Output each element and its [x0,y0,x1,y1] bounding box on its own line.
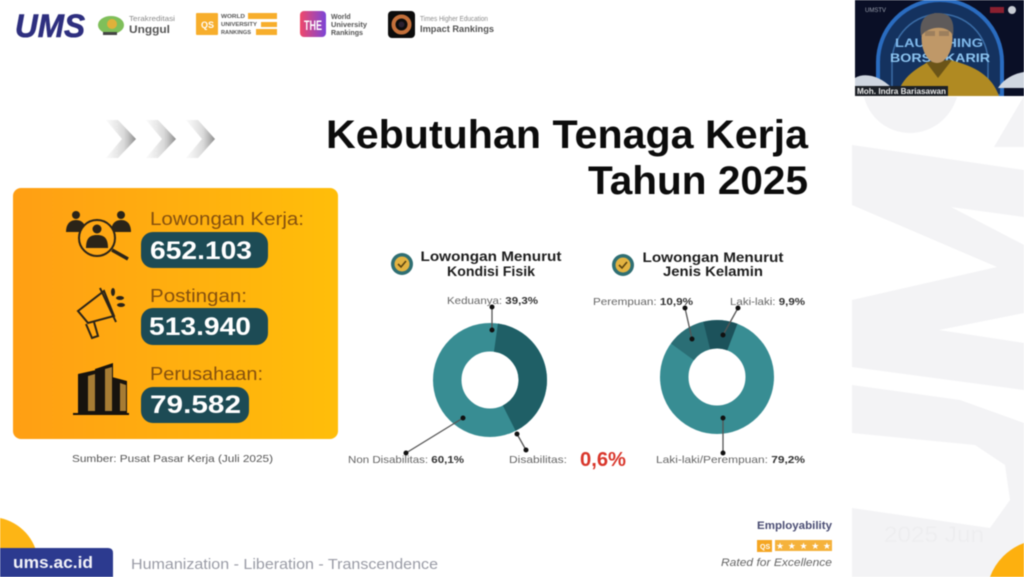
donut chart: kondisi fisik [404,304,538,456]
logo: Terakreditasi Unggul: Unggul [129,24,170,36]
QS employability rating [721,520,833,569]
corner shape: bottom left [0,518,38,560]
logo: THE World University Rankings: World [331,14,351,21]
footer tab: ums.ac.id: ums.ac.id [13,553,93,572]
title: Tahun 2025 [588,159,808,203]
label: Laki-laki: Laki-laki: 9,9% [730,296,806,308]
webcam: speaker video: LAUNCHING [895,36,983,50]
logo: Times Higher Education Impact Rankings: Times Higher Education [420,16,488,23]
webcam: speaker video: Moh. Indra Bariasawan [857,87,946,96]
value: 652.103 [141,232,268,268]
value: 0,6%: 0,6% [580,449,626,471]
label: Keduanya: Keduanya: 39,3% [447,295,539,307]
heading: jenis kelamin [612,250,784,279]
footer tagline: Humanization - Liberation - Transcendence [131,556,438,573]
decorative chevron arrows [106,120,215,158]
label: Non Disabilitas: Non Disabilitas: 60,1% [348,454,465,466]
value: 513.940: 513.940 [149,313,251,341]
logo: THE World University Rankings: THE [304,17,322,33]
logo: THE World University Rankings: Rankings [331,30,363,37]
icon: megaphone [78,288,125,338]
icon: check badge [391,253,413,275]
leader lines [404,304,528,456]
logo: Terakreditasi Unggul: Terakreditasi [129,14,175,23]
icon: people search [66,211,131,259]
logo: UMS: UMS [15,8,86,44]
logo row [15,8,494,44]
logo: Terakreditasi Unggul [98,14,175,36]
QS employability rating: ★★★★★ [776,541,831,551]
value: 79.582 [141,387,249,423]
QS employability rating: QS [760,544,770,551]
label: Disabilitas: Disabilitas: [509,454,567,466]
webcam: speaker video: UMSTV [865,8,886,14]
heading: kondisi fisik: Lowongan Menurut [420,249,562,264]
QS employability rating: Employability [757,520,833,532]
corner shape: bottom right [990,543,1024,577]
webcam: speaker video: BORSA KARIR [890,51,990,65]
heading: jenis kelamin: Jenis Kelamin [663,264,763,279]
label: Postingan: Postingan: [150,286,247,306]
label: Lowongan Kerja: Lowongan Kerja: [150,209,304,229]
faint watermark caption: 2025 Jun [884,522,984,547]
source note: Sumber: Pusat Pasar Kerja (Juli 2025) [72,453,273,465]
donut chart: jenis kelamin [657,306,777,456]
icon: office buildings [73,363,129,415]
logo: QS World University Rankings [196,13,277,36]
value: 652.103: 652.103 [150,237,252,265]
icon: check badge [612,254,634,276]
label: Perusahaan: Perusahaan: [150,364,263,384]
background watermark: UMS letters [852,96,1024,577]
leader lines [682,306,740,456]
logo: THE World University Rankings [300,11,367,37]
logo: Times Higher Education Impact Rankings: Impact Rankings [420,24,494,34]
QS employability rating: Rated for Excellence [721,557,832,569]
logo: QS World University Rankings: RANKINGS [221,30,252,36]
title: Kebutuhan Tenaga Kerja [326,113,809,157]
logo: Times Higher Education Impact Rankings [388,11,494,38]
logo: QS World University Rankings: WORLD [221,14,245,20]
heading: kondisi fisik: Kondisi Fisik [447,264,536,279]
webcam: speaker video [855,0,1024,96]
logo: QS World University Rankings: QS [201,20,214,30]
heading: kondisi fisik [391,249,562,279]
logo: QS World University Rankings: UNIVERSITY [221,22,258,28]
label: Perempuan: Perempuan: 10,9% [593,296,694,308]
title [326,113,809,203]
heading: jenis kelamin: Lowongan Menurut [642,250,784,265]
footer tab: ums.ac.id [0,548,113,577]
panel: job statistics [13,188,338,439]
label: Laki-laki/Perempuan: Laki-laki/Perempuan: 79,2% [656,454,806,466]
value: 513.940 [141,308,268,345]
logo: THE World University Rankings: University [331,22,367,29]
value: 79.582: 79.582 [150,391,241,419]
